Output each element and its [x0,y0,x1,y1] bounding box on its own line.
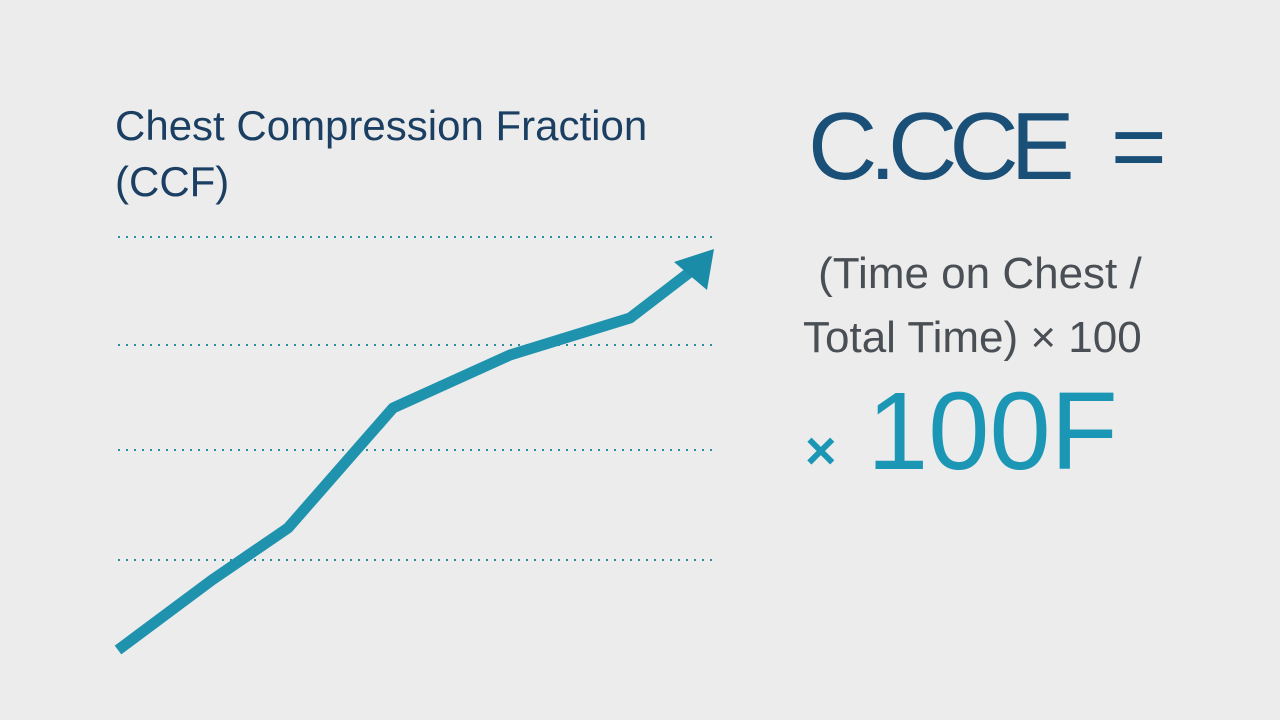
formula text: (Time on Chest / [818,249,1142,298]
chart: rising line with arrow [114,236,714,654]
multiplier: × 100F [805,370,1118,493]
formula text [803,249,1142,362]
title [115,102,647,205]
arrow line [118,249,714,650]
title: (CCF) [115,158,229,205]
title: Chest Compression Fraction [115,102,647,149]
formula heading: C.CCE = [808,93,1167,200]
formula text: Total Time) × 100 [803,313,1142,362]
